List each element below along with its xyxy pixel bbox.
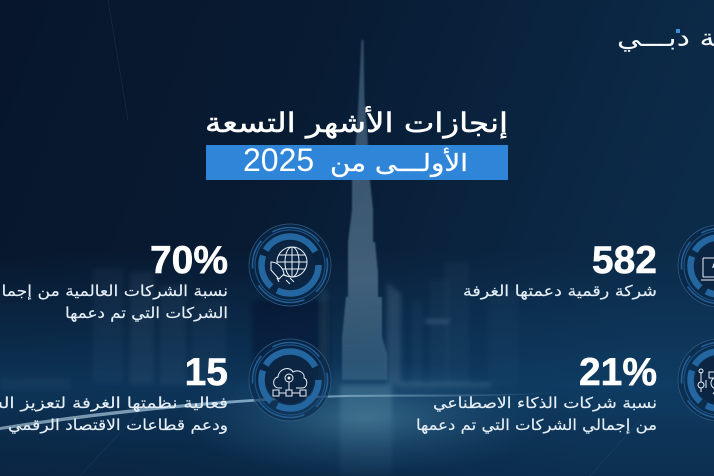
icon: AI circuit (678, 339, 714, 421)
stat: 582: شركة رقمية دعمتها الغرفة (463, 282, 657, 300)
stat: 21%: نسبة شركات الذكاء الاصطناعي (433, 394, 657, 413)
stat: 15 (0, 351, 228, 435)
stat: 582: 582 (592, 239, 657, 282)
stat: 15: ودعم قطاعات الاقتصاد الرقمي (8, 416, 228, 435)
stat: 15: 15 (185, 351, 228, 394)
tower (342, 40, 387, 380)
skyline buildings (0, 262, 518, 390)
stat: 70%: 70% (150, 239, 228, 282)
stat: 21% (416, 351, 657, 435)
subtitle banner: الأولـــى من (330, 148, 468, 177)
horizon light flare (0, 392, 560, 430)
light beam (339, 384, 393, 460)
subtitle banner: 2025 (243, 142, 314, 178)
stat: 70% (0, 239, 228, 323)
stat: 21%: من إجمالي الشركات التي تم دعمها (416, 416, 657, 435)
subtitle banner (206, 142, 508, 180)
stat: 21%: 21% (579, 351, 657, 394)
stat: 582 (463, 239, 657, 300)
title: إنجازات الأشهر التسعة (205, 105, 508, 139)
icon: globe and rocket (249, 224, 331, 306)
stat: 70%: الشركات التي تم دعمها (65, 304, 228, 323)
icon: cloud network (249, 339, 331, 421)
icon: laptop (678, 225, 714, 307)
